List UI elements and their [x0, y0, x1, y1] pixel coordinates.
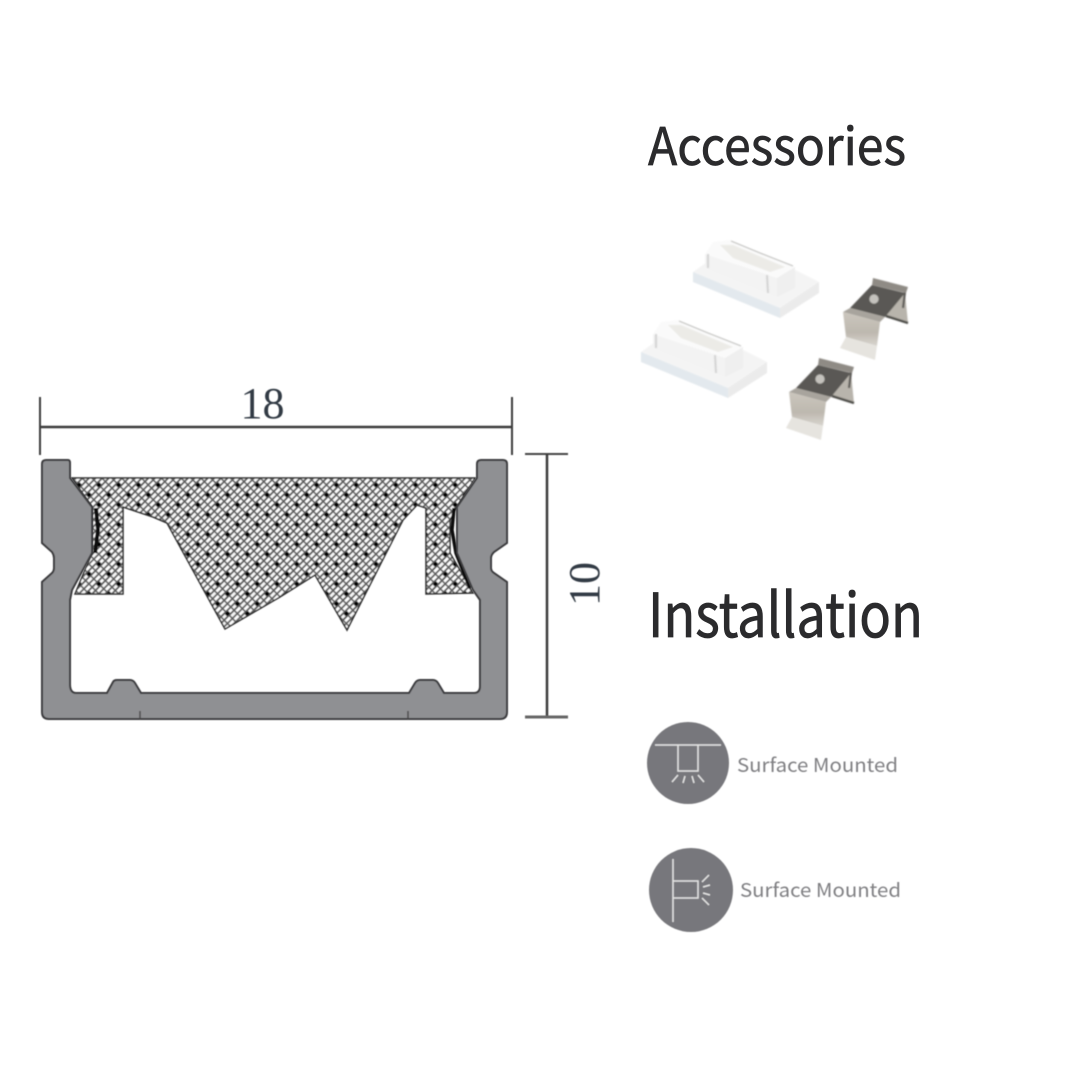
text: width value: 18	[240, 379, 284, 428]
heading: Accessories: Accessories	[648, 105, 906, 180]
panel: profile cross-section drawing	[40, 379, 609, 719]
label: Surface Mounted: Surface Mounted	[740, 876, 901, 903]
label: Surface Mounted: Surface Mounted	[737, 751, 898, 778]
chart: height dimension line	[525, 454, 568, 717]
panel: accessories product photo	[641, 240, 908, 440]
icon: white end cap upper	[693, 240, 819, 318]
chart: aluminium channel profile	[42, 460, 507, 719]
heading: Installation: Installation	[648, 566, 923, 655]
icon: metal mounting clip upper	[840, 278, 908, 360]
chart: width dimension line	[40, 397, 512, 455]
panel: wall surface mounted option	[649, 848, 901, 932]
chart: hatched diffuser cross-section	[72, 478, 475, 630]
icon: metal mounting clip lower	[786, 358, 854, 440]
icon: wall mount	[649, 848, 733, 932]
text: height value: 10	[560, 562, 609, 606]
icon: white end cap lower	[641, 320, 767, 398]
panel: ceiling surface mounted option	[647, 722, 898, 804]
icon: ceiling mount	[647, 722, 729, 804]
